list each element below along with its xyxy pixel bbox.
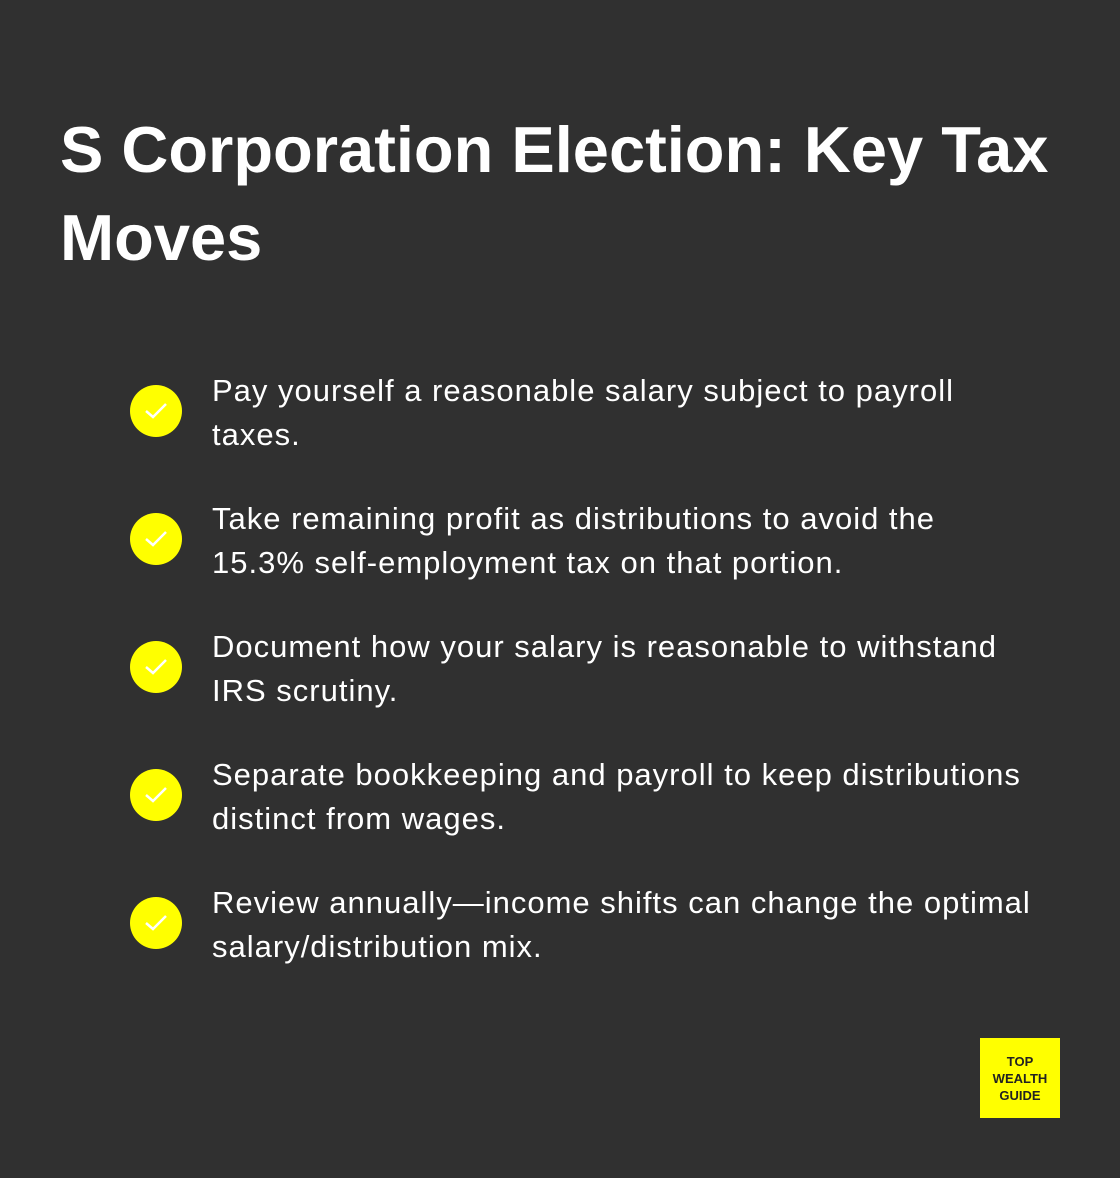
text	[212, 501, 935, 580]
item 1	[130, 373, 954, 452]
title: S Corporation Election: Key Tax	[60, 113, 1048, 186]
text: Review annually—income shifts can change the optimal	[212, 885, 1031, 920]
icon: check	[130, 513, 182, 565]
text: Separate bookkeeping and payroll to keep distributions	[212, 757, 1021, 792]
title: Moves	[60, 201, 262, 274]
text	[212, 629, 997, 708]
text: Pay yourself a reasonable salary subject to payroll	[212, 373, 954, 408]
text	[212, 885, 1031, 964]
text: Take remaining profit as distributions to avoid the	[212, 501, 935, 536]
icon: check	[130, 897, 182, 949]
icon: check	[130, 385, 182, 437]
logo: WEALTH	[993, 1071, 1047, 1086]
text	[212, 373, 954, 452]
text	[212, 757, 1021, 836]
text: IRS scrutiny.	[212, 673, 398, 708]
text: distinct from wages.	[212, 801, 506, 836]
item 4	[130, 757, 1021, 836]
item 5	[130, 885, 1031, 964]
icon: check	[130, 641, 182, 693]
text: salary/distribution mix.	[212, 929, 543, 964]
icon: check	[130, 769, 182, 821]
item 3	[130, 629, 997, 708]
logo: TOP	[1007, 1054, 1033, 1069]
logo: GUIDE	[999, 1088, 1041, 1103]
text: taxes.	[212, 417, 301, 452]
item 2	[130, 501, 935, 580]
logo	[980, 1038, 1060, 1118]
title	[60, 113, 1048, 274]
text: 15.3% self-employment tax on that portion.	[212, 545, 843, 580]
text: Document how your salary is reasonable to withstand	[212, 629, 997, 664]
